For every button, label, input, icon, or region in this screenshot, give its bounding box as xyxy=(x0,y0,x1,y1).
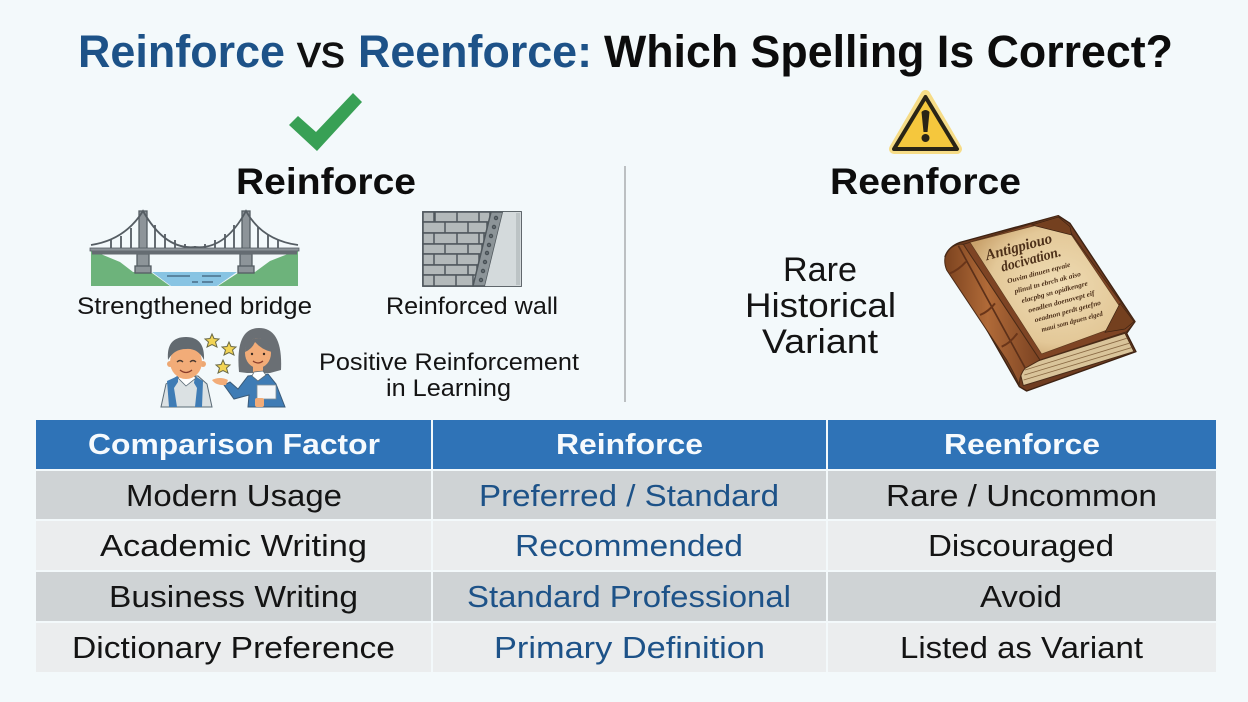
divider xyxy=(624,166,626,402)
label: Strengthened bridge: Strengthened bridge xyxy=(77,293,312,320)
icon: warning triangle xyxy=(894,95,957,149)
book text: elacpbg sn opidkengre xyxy=(1021,279,1089,305)
label: Rare Historical Variant: Variant xyxy=(762,323,879,361)
row: Modern Usage: Rare / Uncommon xyxy=(886,478,1157,513)
towers xyxy=(135,211,254,273)
icon: reinforced wall xyxy=(423,212,521,286)
book text: Ouvim dinuen eqvaie xyxy=(1006,261,1071,285)
label: Positive Reinforcement in Learning: Positive Reinforcement xyxy=(319,349,579,376)
row: Academic Writing xyxy=(36,521,1216,570)
label: Positive Reinforcement in Learning xyxy=(319,349,579,402)
label: Rare Historical Variant xyxy=(745,251,896,361)
comparison table xyxy=(36,420,1216,672)
page block xyxy=(1021,333,1134,386)
label: Rare Historical Variant: Historical xyxy=(745,287,896,325)
book text: Antigpiouo xyxy=(983,230,1054,264)
book text xyxy=(983,222,1105,343)
title: Reinforce xyxy=(78,26,285,77)
deck xyxy=(90,248,299,251)
row: Modern Usage: Modern Usage xyxy=(126,478,342,513)
table header: Reenforce xyxy=(944,429,1100,461)
icon: green check mark xyxy=(289,93,362,151)
row: Modern Usage xyxy=(36,471,1216,519)
row: Business Writing: Business Writing xyxy=(109,579,358,614)
icon: student and teacher with stars xyxy=(161,328,285,407)
teacher xyxy=(212,328,285,407)
row: Modern Usage: Preferred / Standard xyxy=(479,478,779,513)
table header xyxy=(36,420,1216,469)
row: Dictionary Preference: Listed as Variant xyxy=(900,630,1143,665)
heading: Reenforce: Reenforce xyxy=(830,161,1021,202)
heading: Reinforce: Reinforce xyxy=(236,161,416,202)
title xyxy=(78,26,1173,77)
book text: plinul tn ebrch ak aiso xyxy=(1013,270,1082,296)
table header: Comparison Factor xyxy=(88,429,380,461)
book text: maui som dpuen elged xyxy=(1040,310,1104,334)
row: Dictionary Preference xyxy=(36,623,1216,672)
row: Academic Writing: Recommended xyxy=(515,528,743,563)
spine xyxy=(945,244,1040,385)
water xyxy=(152,272,237,286)
row: Academic Writing: Discouraged xyxy=(928,528,1114,563)
icon: suspension bridge xyxy=(90,211,299,286)
title: Which Spelling Is Correct? xyxy=(604,26,1173,77)
row: Dictionary Preference: Dictionary Preference xyxy=(72,630,395,665)
parchment page xyxy=(970,219,1130,354)
book text: oeadnon perdt getefno xyxy=(1034,299,1102,324)
row: Business Writing: Avoid xyxy=(980,579,1062,614)
corners xyxy=(1032,217,1072,235)
right bank xyxy=(218,250,298,286)
row: Business Writing: Standard Professional xyxy=(467,579,791,614)
label: Reinforced wall: Reinforced wall xyxy=(386,293,558,320)
left bank xyxy=(91,250,170,286)
stars xyxy=(205,334,236,373)
table header: Reinforce xyxy=(556,429,703,461)
row: Academic Writing: Academic Writing xyxy=(100,528,367,563)
cables xyxy=(91,211,298,250)
label: Rare Historical Variant: Rare xyxy=(783,251,857,289)
label: Positive Reinforcement in Learning: in Learning xyxy=(386,375,511,402)
cover xyxy=(963,216,1135,360)
row: Dictionary Preference: Primary Definition xyxy=(494,630,765,665)
title: vs xyxy=(297,26,345,77)
icon: antique book xyxy=(945,216,1136,391)
row: Business Writing xyxy=(36,572,1216,621)
book text: docivation. xyxy=(999,244,1063,276)
book text: oeadlen doenovept eif xyxy=(1027,289,1096,315)
title: Reenforce: xyxy=(358,26,592,77)
student xyxy=(161,337,212,407)
back cover xyxy=(945,216,1136,391)
